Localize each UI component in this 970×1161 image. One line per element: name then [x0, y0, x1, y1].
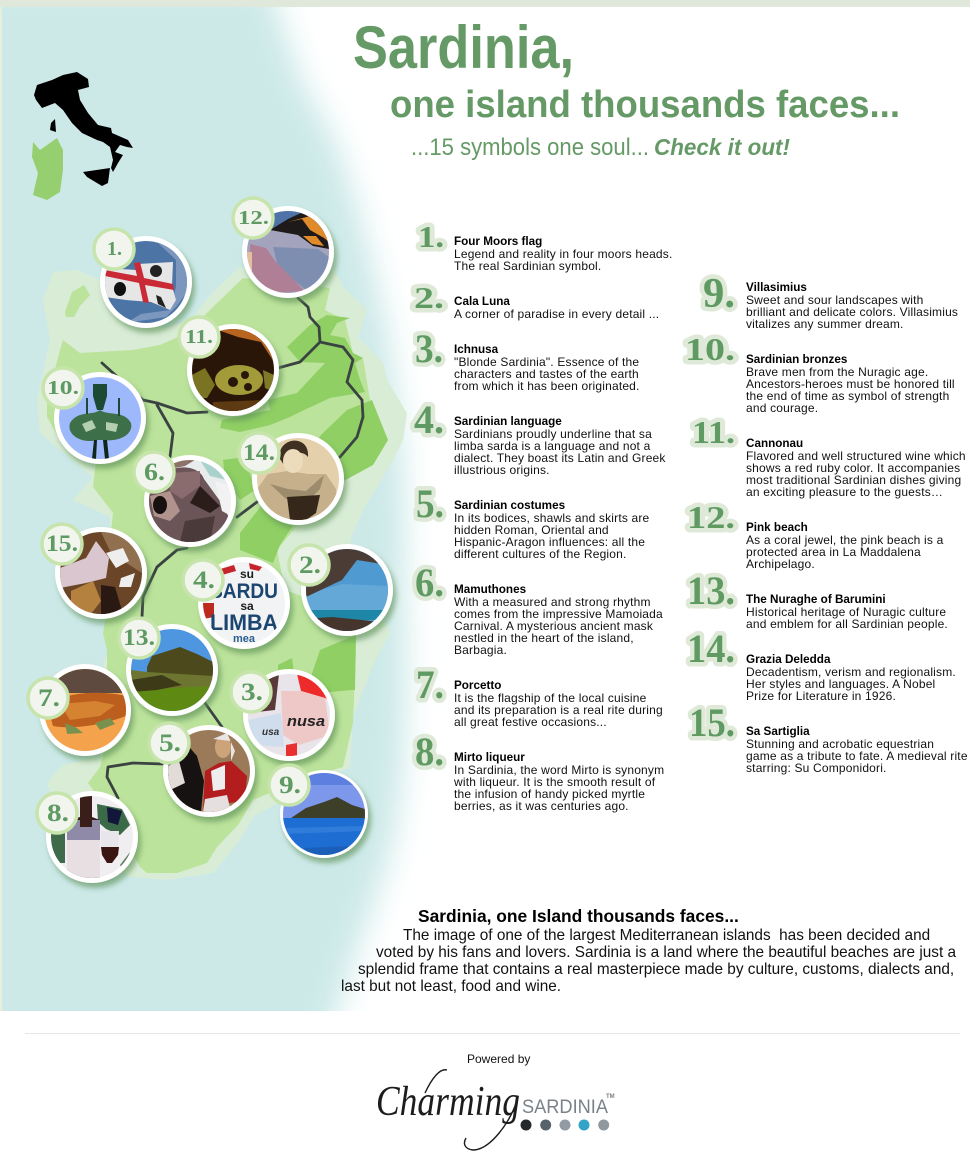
- land: coastal shelf: [37, 267, 407, 880]
- item 10: Sardinian bronzes: Sardinian bronzes: [746, 353, 847, 366]
- item 10: Sardinian bronzes: Brave men from the Nuragic age.: [746, 365, 928, 379]
- item 8: Mirto liqueur: with liqueur. It is the smooth result of: [454, 775, 655, 789]
- item 1: Four Moors flag: [454, 235, 672, 273]
- item 1: Four Moors flag: Four Moors flag: [454, 235, 542, 248]
- item 14: Grazia Deledda: Prize for Literature in 1926.: [746, 689, 896, 703]
- item 4: Sardinian language: limba sarda is a language and not a: [454, 439, 650, 453]
- footer divider: [25, 1033, 960, 1034]
- list numerals: 14.: [687, 626, 735, 671]
- item 8: Mirto liqueur: the infusion of handy picked myrtle: [454, 787, 645, 801]
- item 12: Pink beach: Pink beach: [746, 521, 808, 534]
- item 9: Villasimius: brilliant and delicate colors. Villasimius: [746, 305, 958, 319]
- land: darker green interior east: [240, 400, 388, 563]
- item 2: Cala Luna: [454, 295, 659, 321]
- item 1: Four Moors flag: The real Sardinian symbol.: [454, 259, 601, 273]
- closing line 3: splendid frame that contains a real masterpiece made by culture, customs, dialects and,: [358, 961, 954, 978]
- list numerals: 12.: [687, 499, 735, 535]
- photo 4: sardinian language: SARDU: [210, 580, 278, 603]
- closing heading: Sardinia, one Island thousands faces...: [418, 906, 739, 926]
- item 5: Sardinian costumes: [454, 499, 649, 561]
- powered by: Powered by: [467, 1052, 530, 1066]
- item 14: Grazia Deledda: [746, 653, 956, 703]
- item 10: Sardinian bronzes: Ancestors-heroes must be honored till: [746, 377, 955, 391]
- photo 12: pink beach: [233, 198, 334, 298]
- title: [353, 14, 900, 161]
- item 11: Cannonau: Flavored and well structured wine which: [746, 449, 966, 463]
- item 6: Mamuthones: comes from the impressive Mamoiada: [454, 607, 663, 621]
- list numerals: 13.: [687, 568, 735, 613]
- badge 6: 6.: [144, 459, 165, 486]
- title: ...15 symbols one soul...: [411, 134, 649, 161]
- list numerals: [414, 219, 735, 774]
- photo 2: cala luna: [289, 544, 393, 636]
- item 12: Pink beach: Archipelago.: [746, 557, 815, 571]
- item 9: Villasimius: Villasimius: [746, 281, 807, 294]
- photo 13: nuraghe of barumini: [119, 618, 218, 716]
- item 9: Villasimius: Sweet and sour landscapes with: [746, 293, 924, 307]
- list numerals: 5.: [416, 481, 444, 526]
- photo 14: grazia deledda: [239, 433, 344, 525]
- photo 4: sardinian language: [183, 557, 290, 649]
- map of Sardinia: [37, 267, 407, 880]
- list numerals: 6.: [415, 560, 444, 605]
- item 12: Pink beach: [746, 521, 944, 571]
- item 4: Sardinian language: illustrious origins.: [454, 463, 550, 477]
- badge 12: 12.: [238, 207, 269, 229]
- item 5: Sardinian costumes: different cultures of the Region.: [454, 547, 626, 561]
- land: southern dark patch: [303, 635, 356, 700]
- item 3: Ichnusa: "Blonde Sardinia". Essence of the: [454, 355, 639, 369]
- list numerals: 9.: [703, 271, 735, 317]
- item 5: Sardinian costumes: Sardinian costumes: [454, 499, 565, 512]
- badge 15: 15.: [46, 531, 78, 556]
- land: northern inlet: [65, 285, 90, 317]
- roads: [102, 298, 363, 798]
- item 11: Cannonau: most traditional Sardinian dishes giving: [746, 473, 961, 487]
- item 8: Mirto liqueur: berries, as it was centuries ago.: [454, 799, 629, 813]
- closing line 4: last but not least, food and wine.: [341, 978, 561, 995]
- item 5: Sardinian costumes: In its bodices, shawls and skirts are: [454, 511, 649, 525]
- item 2: Cala Luna: A corner of paradise in every detail ...: [454, 307, 659, 321]
- logo: Charming Sardinia: TM: [606, 1094, 615, 1100]
- land: darker green patch centre: [223, 457, 255, 500]
- land: main green: [47, 278, 387, 873]
- item 13: The Nuraghe of Barumini: and emblem for all Sardinian people.: [746, 617, 948, 631]
- item 6: Mamuthones: With a measured and strong rhythm: [454, 595, 651, 609]
- badge 5: 5.: [159, 730, 181, 757]
- item 15: Sa Sartiglia: starring: Su Componidori.: [746, 761, 887, 775]
- item 5: Sardinian costumes: Hispanic-Aragon influences: all the: [454, 535, 645, 549]
- item 15: Sa Sartiglia: [746, 725, 968, 775]
- badge 7: 7.: [38, 685, 60, 712]
- item 15: Sa Sartiglia: Stunning and acrobatic equestrian: [746, 737, 934, 751]
- badge 8: 8.: [47, 800, 69, 827]
- list numerals: 2.: [414, 280, 444, 315]
- item 4: Sardinian language: dialect. They boast its Latin and Greek: [454, 451, 666, 465]
- item 7: Porcetto: and its preparation is a real rite during: [454, 703, 663, 717]
- land: darker green interior north: [220, 315, 365, 432]
- photo 7: porcetto: [28, 664, 131, 756]
- list numerals: 10.: [685, 331, 735, 367]
- item 11: Cannonau: an exciting pleasure to the guests…: [746, 485, 943, 499]
- item 13: The Nuraghe of Barumini: The Nuraghe of Barumini: [746, 593, 886, 606]
- logo: Charming Sardinia: [376, 1070, 615, 1150]
- item 11: Cannonau: shows a red ruby color. It accompanies: [746, 461, 960, 475]
- badge 14: 14.: [243, 440, 275, 465]
- item 3: Ichnusa: from which it has been originated.: [454, 379, 640, 393]
- item 10: Sardinian bronzes: [746, 353, 955, 415]
- photo 1: four moors flag: [94, 229, 192, 328]
- top stripe: [0, 0, 970, 7]
- closing line 2: voted by his fans and lovers. Sardinia is a land where the beautiful beaches are just a: [376, 944, 956, 961]
- item 13: The Nuraghe of Barumini: Historical heritage of Nuragic culture: [746, 605, 946, 619]
- item 10: Sardinian bronzes: and courage.: [746, 401, 818, 415]
- item 9: Villasimius: vitalizes any summer dream.: [746, 317, 904, 331]
- badge 3: 3.: [241, 679, 263, 706]
- badge 13: 13.: [123, 625, 155, 650]
- item 6: Mamuthones: Mamuthones: [454, 583, 526, 596]
- item 11: Cannonau: Cannonau: [746, 437, 803, 450]
- item 3: Ichnusa: Ichnusa: [454, 343, 498, 356]
- item 7: Porcetto: [454, 679, 663, 729]
- item 8: Mirto liqueur: In Sardinia, the word Mirto is synonym: [454, 763, 664, 777]
- photo 15: sa sartiglia: [42, 524, 147, 619]
- item 6: Mamuthones: Carnival. A mysterious ancient mask: [454, 619, 653, 633]
- item 15: Sa Sartiglia: Sa Sartiglia: [746, 725, 810, 738]
- title: Check it out!: [654, 134, 790, 160]
- item 13: The Nuraghe of Barumini: [746, 593, 948, 631]
- item 4: Sardinian language: [454, 415, 666, 477]
- item 6: Mamuthones: [454, 583, 663, 657]
- item 10: Sardinian bronzes: the end of time as symbol of strength: [746, 389, 949, 403]
- list numerals: 8.: [415, 729, 444, 774]
- list numerals: 3.: [415, 326, 443, 371]
- photo 6: mamuthones: [134, 452, 236, 547]
- closing line 1: The image of one of the largest Mediterranean islands has been decided and: [403, 927, 930, 944]
- item 4: Sardinian language: Sardinian language: [454, 415, 562, 428]
- item 11: Cannonau: [746, 437, 966, 499]
- list numerals: 4.: [414, 397, 444, 442]
- land: south-east patch: [278, 658, 294, 676]
- photo 4: sardinian language: sa: [240, 599, 254, 613]
- title: Sardinia,: [353, 14, 574, 81]
- item 7: Porcetto: It is the flagship of the local cuisine: [454, 691, 646, 705]
- photo 9: villasimius: [269, 765, 368, 858]
- photo 8: mirto liqueur: [37, 791, 138, 883]
- badge 1: 1.: [107, 238, 122, 260]
- logo: Charming Sardinia: Charming: [376, 1079, 520, 1125]
- photo 4: sardinian language: mea: [233, 633, 256, 645]
- title: one island thousands faces...: [390, 84, 900, 126]
- photo 11: cannonau: [179, 317, 279, 416]
- item 4: Sardinian language: Sardinians proudly underline that sa: [454, 427, 652, 441]
- photo 5: sardinian costumes: [149, 723, 255, 817]
- list numerals: 1.: [418, 219, 444, 254]
- badge 4: 4.: [193, 567, 215, 594]
- photo 4: sardinian language: su: [240, 567, 254, 581]
- list numerals: 7.: [416, 662, 444, 707]
- item 5: Sardinian costumes: hidden Roman, Oriental and: [454, 523, 609, 537]
- badge 9: 9.: [279, 772, 301, 799]
- item 8: Mirto liqueur: [454, 751, 664, 813]
- item 3: Ichnusa: characters and tastes of the earth: [454, 367, 639, 381]
- photo 3: ichnusa: [231, 669, 335, 761]
- item 12: Pink beach: protected area in La Maddalena: [746, 545, 921, 559]
- list numerals: 11.: [692, 414, 735, 450]
- item 14: Grazia Deledda: Decadentism, verism and regionalism.: [746, 665, 956, 679]
- badge 2: 2.: [299, 552, 321, 579]
- icon: Italy silhouette: [32, 72, 133, 200]
- logo: Charming Sardinia: SARDINIA: [522, 1097, 608, 1118]
- item 12: Pink beach: As a coral jewel, the pink beach is a: [746, 533, 943, 547]
- item 6: Mamuthones: nestled in the heart of the island,: [454, 631, 634, 645]
- list numerals: 15.: [689, 700, 735, 745]
- badge 10: 10.: [47, 377, 79, 399]
- item 3: Ichnusa: [454, 343, 640, 393]
- item 7: Porcetto: all great festive occasions...: [454, 715, 607, 729]
- photo 10: sardinian bronzes: [43, 368, 146, 464]
- item 2: Cala Luna: Cala Luna: [454, 295, 510, 308]
- item 7: Porcetto: Porcetto: [454, 679, 501, 692]
- sea background: [0, 0, 406, 1060]
- item 1: Four Moors flag: Legend and reality in four moors heads.: [454, 247, 672, 261]
- badge 11: 11.: [185, 326, 213, 348]
- item 8: Mirto liqueur: Mirto liqueur: [454, 751, 525, 764]
- photo 3: ichnusa: usa: [262, 727, 280, 738]
- photo 3: ichnusa: nusa: [287, 713, 325, 730]
- item 6: Mamuthones: Barbagia.: [454, 643, 507, 657]
- item 9: Villasimius: [746, 281, 958, 331]
- item 14: Grazia Deledda: Grazia Deledda: [746, 653, 830, 666]
- photo 4: sardinian language: LIMBA: [210, 610, 278, 635]
- item 15: Sa Sartiglia: game as a tribute to fate. A medieval rite: [746, 749, 968, 763]
- item 14: Grazia Deledda: Her styles and languages. A Nobel: [746, 677, 935, 691]
